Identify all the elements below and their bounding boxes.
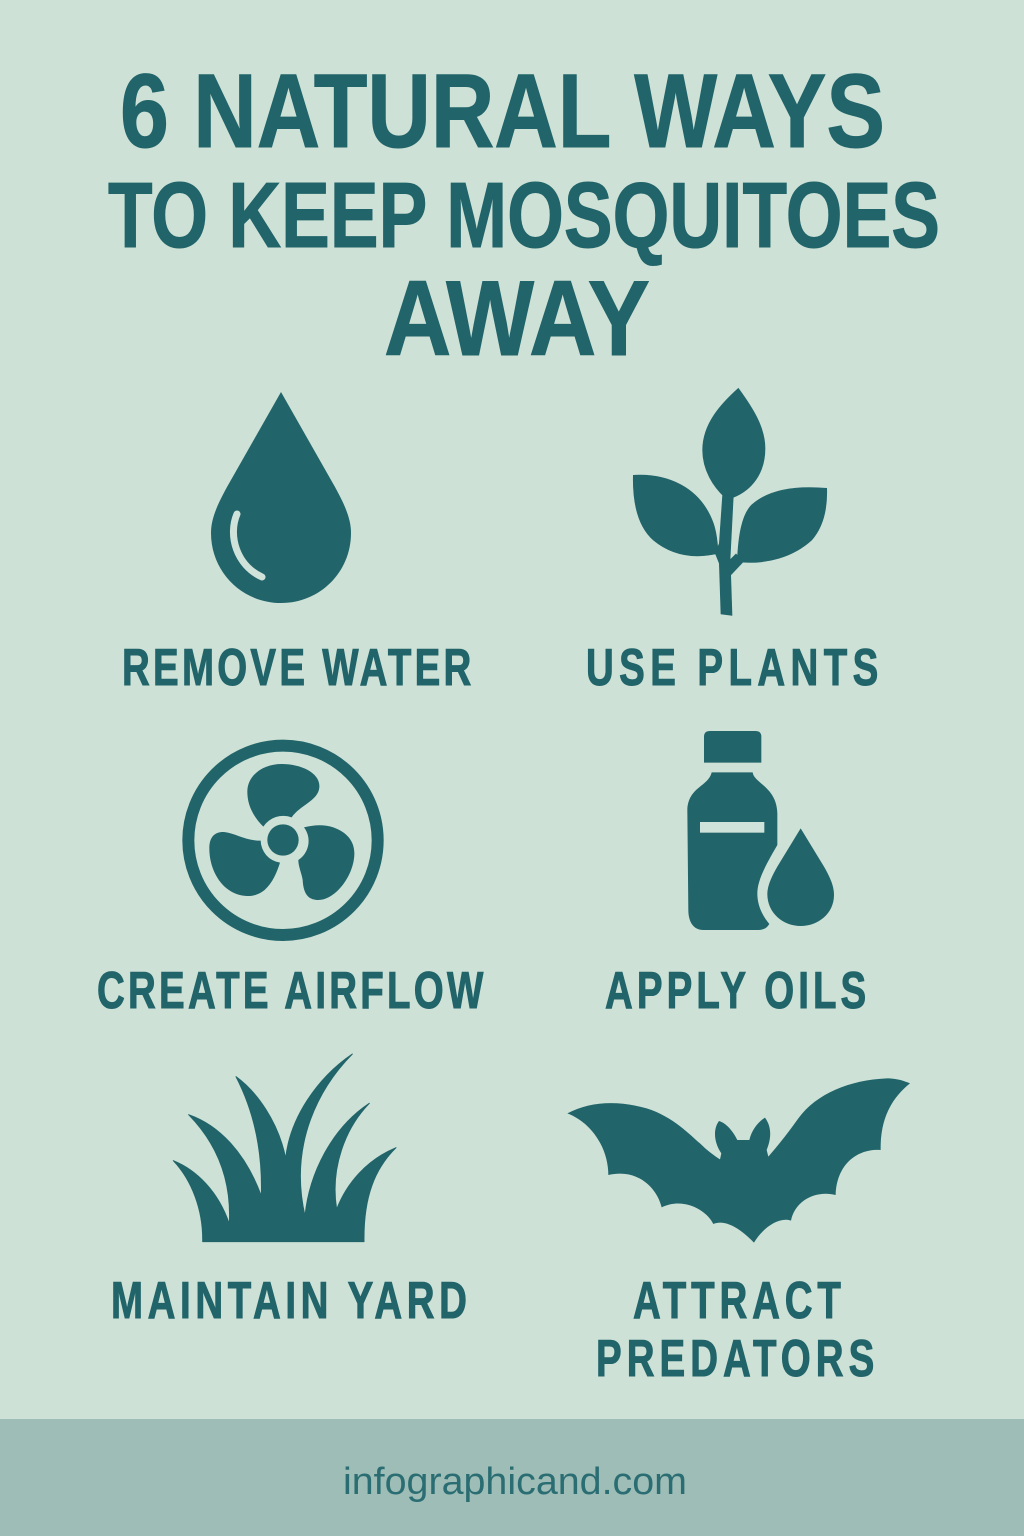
item: use plants (586, 388, 878, 696)
label: remove water: REMOVE WATER (122, 638, 471, 696)
label: maintain yard: MAINTAIN YARD (111, 1271, 467, 1329)
label: attract predators: PREDATORS (596, 1329, 874, 1387)
icon: plant (633, 388, 827, 615)
footer text: infographicand.com (343, 1461, 687, 1503)
item: attract predators (567, 1078, 910, 1387)
label: apply oils: APPLY OILS (605, 961, 866, 1019)
item: maintain yard (111, 1054, 467, 1329)
label: use plants: USE PLANTS (586, 638, 878, 696)
icon: fan (188, 746, 378, 935)
item: remove water (122, 392, 471, 696)
label: create airflow: CREATE AIRFLOW (97, 961, 484, 1019)
label: attract predators: ATTRACT (633, 1271, 841, 1329)
item: apply oils (605, 731, 866, 1019)
label: attract predators (596, 1271, 874, 1387)
icon: bat (567, 1078, 910, 1243)
footer bar (0, 1419, 1024, 1536)
title: AWAY (384, 258, 650, 378)
icon: grass (173, 1054, 396, 1242)
title: 6 NATURAL WAYS (120, 53, 885, 170)
title (108, 53, 940, 378)
icon: oil bottle and drop (687, 731, 834, 930)
item: create airflow (97, 746, 484, 1019)
icon: water drop (211, 392, 351, 603)
